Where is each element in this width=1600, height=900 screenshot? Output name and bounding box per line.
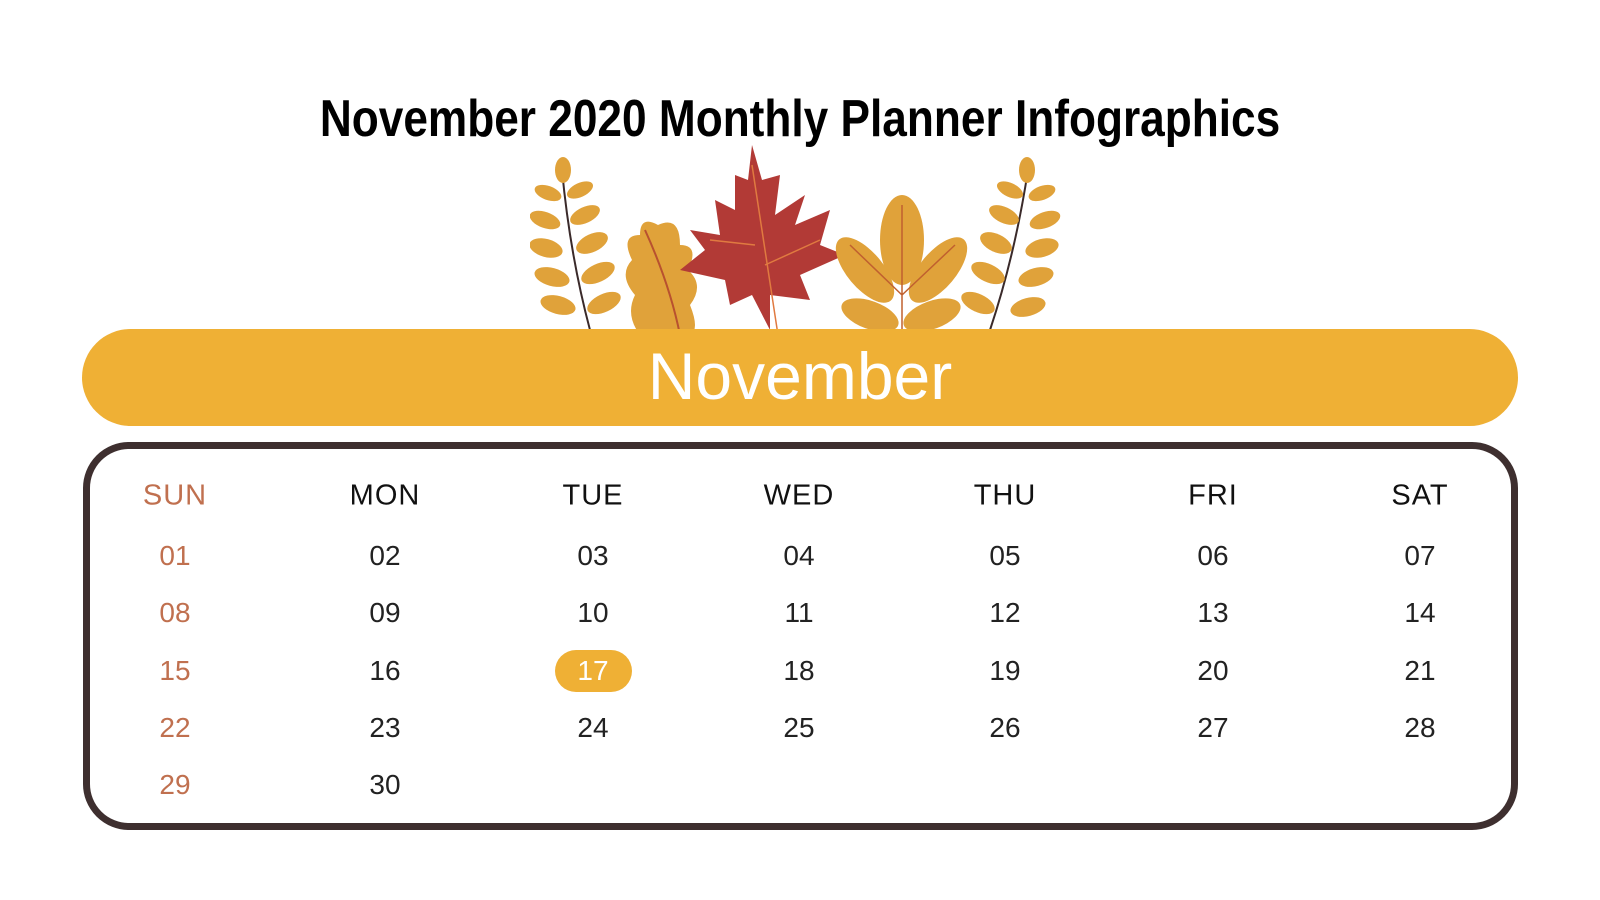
day numbers: 11 <box>784 597 814 628</box>
weekday headers: TUE <box>562 480 624 512</box>
weekday headers: SUN <box>143 480 207 512</box>
icon: right fern <box>958 157 1063 330</box>
day numbers: 23 <box>369 712 401 743</box>
day numbers: 19 <box>989 655 1021 686</box>
day numbers: 17 <box>577 655 609 686</box>
day numbers: 03 <box>577 540 609 571</box>
day numbers: 09 <box>369 597 401 628</box>
day numbers: 18 <box>783 655 815 686</box>
day numbers: 22 <box>159 712 191 743</box>
day numbers: 10 <box>577 597 609 628</box>
day numbers: 04 <box>783 540 815 571</box>
day numbers: 30 <box>369 769 401 800</box>
day numbers: 14 <box>1404 597 1436 628</box>
weekday headers: SAT <box>1391 480 1449 512</box>
weekday headers: WED <box>764 480 834 512</box>
calendar panel <box>83 442 1518 830</box>
month banner <box>82 329 1518 426</box>
icon: left fern <box>527 157 624 330</box>
weekday headers: THU <box>974 480 1036 512</box>
month name: November <box>648 339 952 413</box>
day numbers: 08 <box>159 597 191 628</box>
day numbers: 02 <box>369 540 401 571</box>
icon: chestnut leaf <box>825 195 978 338</box>
day numbers: 07 <box>1404 540 1436 571</box>
day numbers: 24 <box>577 712 609 743</box>
leaves illustration <box>530 145 1060 329</box>
day numbers: 20 <box>1197 655 1229 686</box>
day numbers: 29 <box>159 769 191 800</box>
day numbers: 05 <box>989 540 1021 571</box>
day numbers: 06 <box>1197 540 1229 571</box>
day numbers: 28 <box>1404 712 1436 743</box>
weekday headers: FRI <box>1188 480 1238 512</box>
icon: maple leaf <box>680 145 845 335</box>
weekday headers: MON <box>350 480 420 512</box>
title: November 2020 Monthly Planner Infographics <box>320 90 1280 148</box>
icon: oak leaf <box>626 222 697 335</box>
highlight: 17 <box>555 650 632 692</box>
day numbers: 21 <box>1404 655 1436 686</box>
day numbers: 13 <box>1197 597 1229 628</box>
day numbers: 26 <box>989 712 1021 743</box>
day numbers: 25 <box>783 712 815 743</box>
day numbers: 12 <box>989 597 1021 628</box>
day numbers: 16 <box>369 655 401 686</box>
day numbers: 27 <box>1197 712 1229 743</box>
day numbers: 01 <box>159 540 191 571</box>
day numbers: 15 <box>159 655 191 686</box>
